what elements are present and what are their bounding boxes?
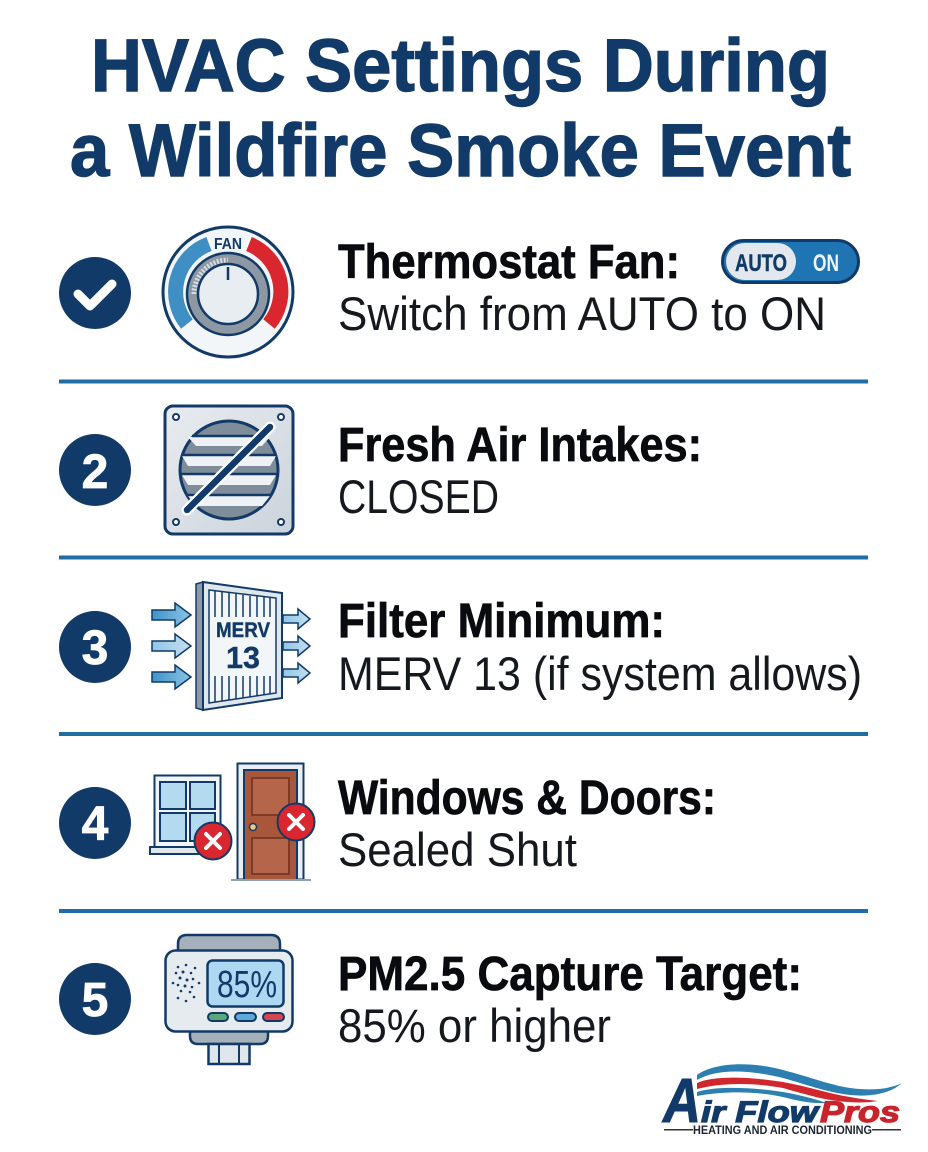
value: closed: CLOSED [338, 470, 499, 523]
row 3: filter minimum [59, 582, 862, 710]
value: switch from auto to on: Switch from AUTO to ON [338, 287, 826, 340]
heading: filter minimum: Filter Minimum: [338, 595, 665, 648]
value: merv 13: MERV 13 (if system allows) [338, 647, 862, 700]
badge: 3: 3 [82, 622, 108, 675]
icon: merv 13 filter: MERV [216, 619, 270, 642]
icon: air quality monitor: 85% [217, 964, 277, 1006]
icon: fan dial [163, 227, 293, 357]
icon: merv 13 filter: 13 [226, 640, 260, 675]
badge: 2 [59, 434, 131, 506]
logo: air flow pros: HEATING AND AIR CONDITIONING [693, 1123, 872, 1137]
icon: air quality monitor [166, 935, 292, 1064]
logo: air flow pros: Pros [820, 1096, 900, 1129]
icon: merv 13 filter [152, 582, 310, 710]
heading: thermostat fan: Thermostat Fan: [338, 236, 680, 289]
logo: air flow pros [661, 1064, 902, 1137]
badge: 4: 4 [82, 798, 109, 851]
toggle: auto on [722, 240, 858, 282]
badge: 2: 2 [82, 446, 108, 499]
badge: 5 [59, 963, 131, 1035]
value: 85 percent or higher: 85% or higher [338, 999, 611, 1052]
icon: window and door [150, 764, 314, 881]
heading: pm2.5 capture target: PM2.5 Capture Target: [338, 948, 802, 1001]
title [70, 24, 851, 192]
logo: air flow pros: ir Flow [701, 1096, 820, 1129]
title: HVAC Settings During [91, 24, 830, 107]
icon: fan dial: FAN [214, 236, 242, 253]
heading: windows and doors: Windows & Doors: [338, 772, 716, 825]
row 2: fresh air intakes [59, 406, 702, 534]
row 1: thermostat fan [59, 227, 858, 357]
badge: check mark [59, 257, 131, 329]
heading: fresh air intakes: Fresh Air Intakes: [338, 419, 702, 472]
title: a Wildfire Smoke Event [70, 109, 851, 192]
badge: 3 [59, 611, 131, 683]
icon: closed vent [165, 406, 293, 534]
value: sealed shut: Sealed Shut [338, 823, 577, 876]
toggle: auto on: AUTO [735, 250, 787, 277]
badge: 4 [59, 787, 131, 859]
row 4: windows and doors [59, 764, 716, 881]
row 5: pm2.5 capture target [59, 935, 802, 1064]
logo: air flow pros: A [661, 1067, 701, 1136]
badge: 5: 5 [82, 974, 108, 1027]
toggle: auto on: ON [813, 250, 839, 277]
